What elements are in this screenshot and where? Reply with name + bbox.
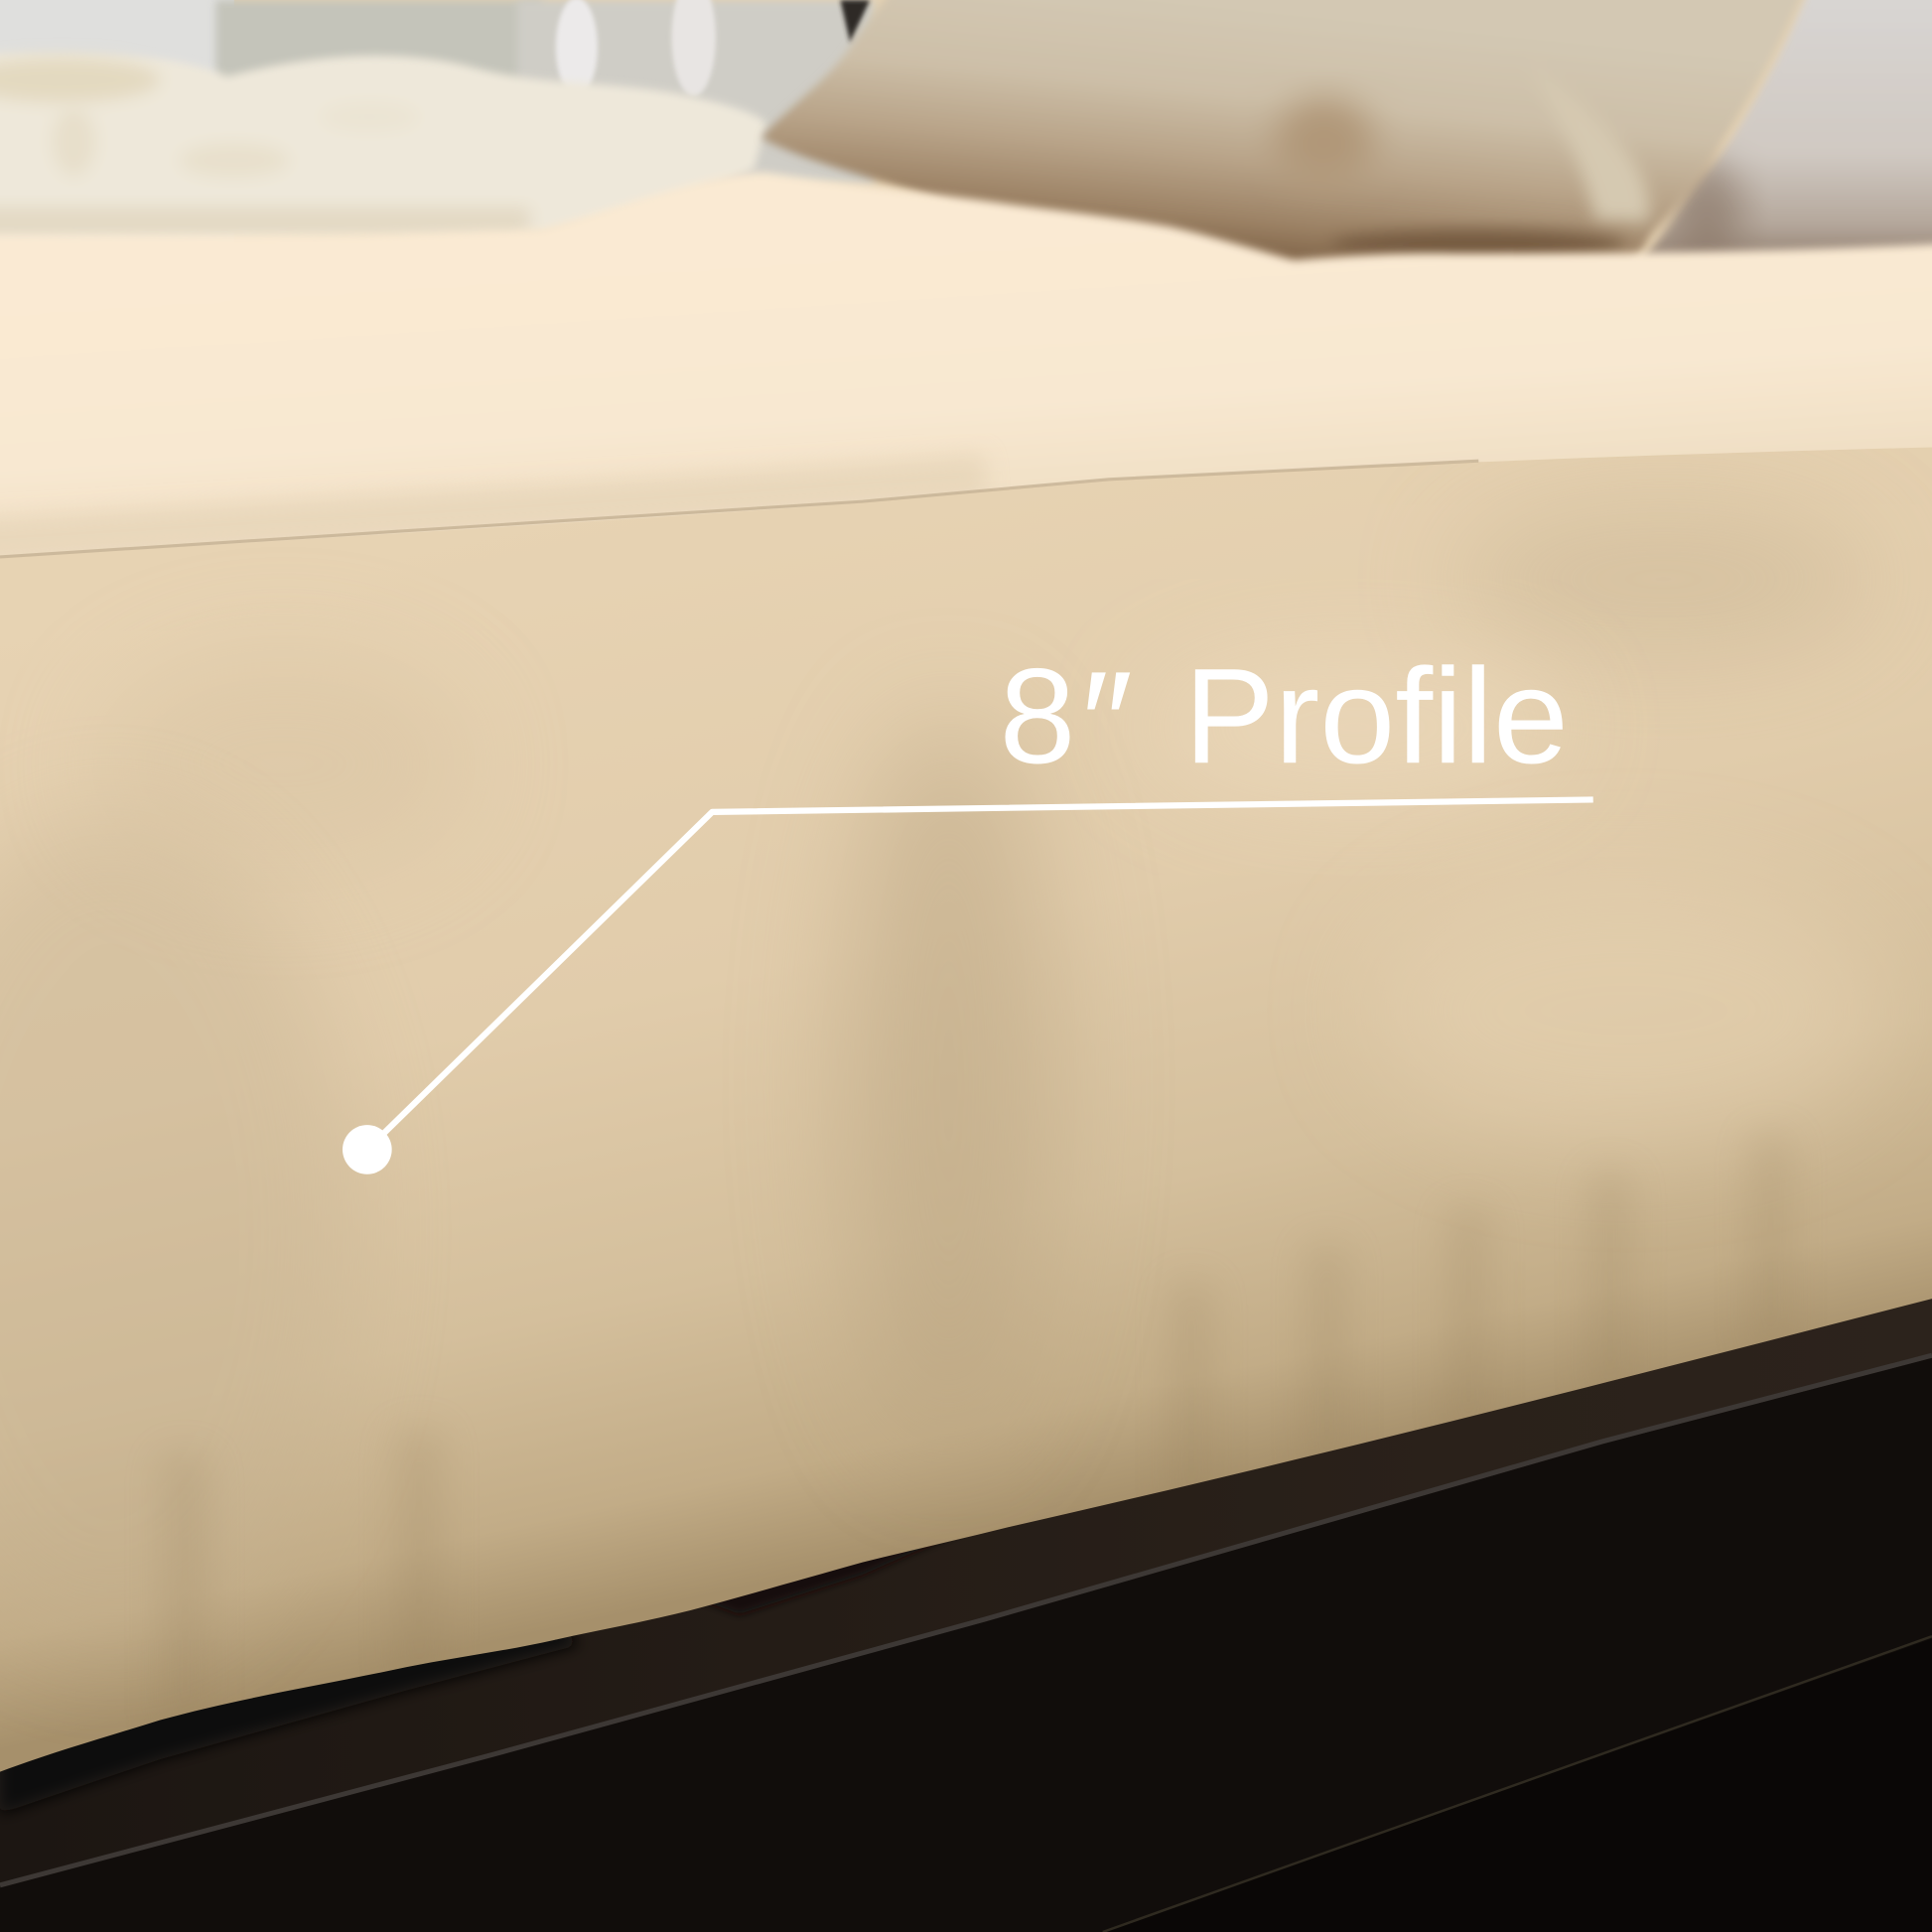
callout leader line [367,799,1593,1150]
background: blurred room [0,0,875,271]
beige pillow [761,0,1805,277]
callout label: 8 [1000,639,1075,791]
mattress top surface [0,173,1932,579]
callout dot [343,1125,392,1174]
mattress side panel [0,448,1932,1772]
callout: 8 inch profile [343,639,1593,1174]
callout label: ″ [1074,641,1130,804]
throw blanket [0,53,766,244]
black bed frame [0,1257,1932,1932]
right headboard cushion [1639,0,1932,265]
callout label: Profile [1184,639,1569,791]
